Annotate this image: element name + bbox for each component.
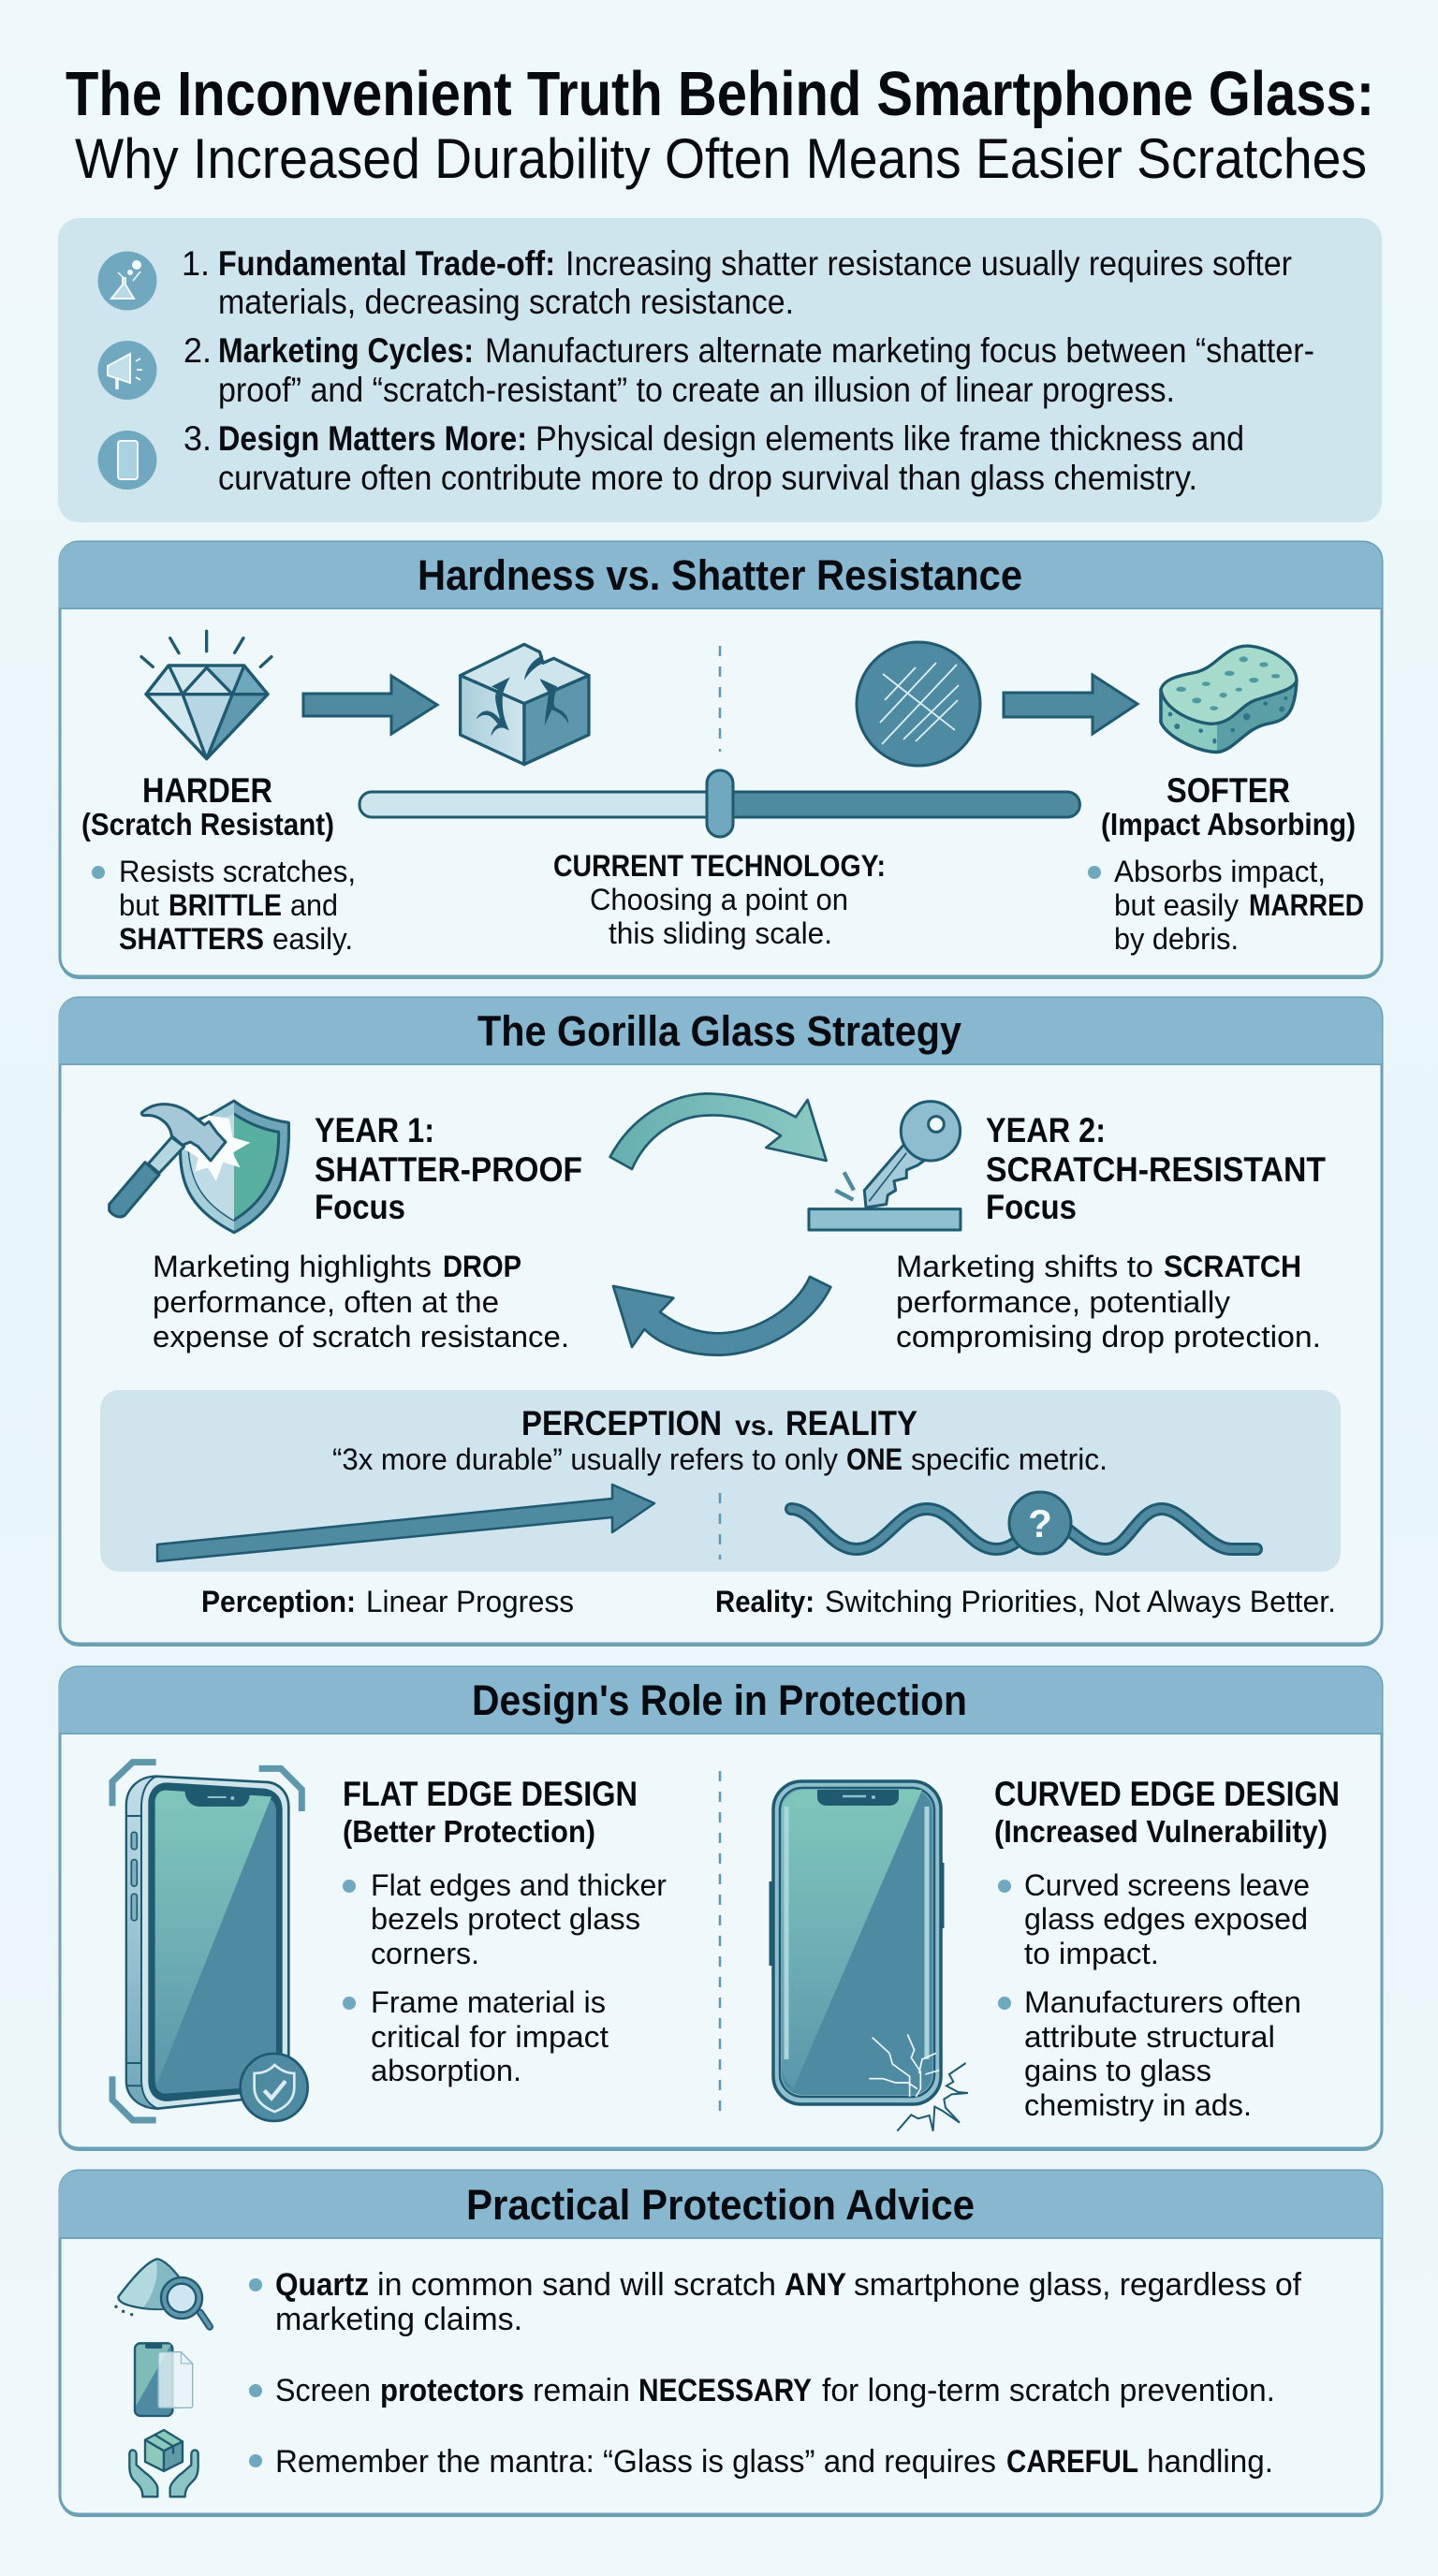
icon: flask	[97, 251, 157, 311]
title: Why Increased Durability Often Means Easier Scratches	[75, 127, 1367, 190]
text: curved edge notes: attribute structural	[1024, 2020, 1275, 2054]
text: screen protectors: protectors	[380, 2373, 524, 2408]
divider	[719, 646, 721, 752]
icon: hands holding box	[129, 2430, 198, 2496]
text: flat edge notes	[343, 1868, 667, 2087]
icon: scratched glass disc	[857, 642, 980, 766]
text: 3x more durable: “3x more durable” usually refers to only	[332, 1442, 838, 1476]
text: harder notes: and	[290, 888, 338, 922]
heading: The Gorilla Glass Strategy	[477, 1007, 961, 1055]
heading: year 2: Focus	[986, 1188, 1077, 1226]
text: 3x more durable	[332, 1442, 1108, 1476]
icon: sand and magnifier	[114, 2259, 210, 2327]
heading: year 2	[986, 1111, 1326, 1226]
text: quartz: marketing claims.	[275, 2302, 522, 2337]
text: softer notes: but easily	[1114, 888, 1239, 922]
icon: wavy line with question mark	[791, 1492, 1256, 1554]
takeaway 3: curvature often contribute more to drop survival than glass chemistry.	[218, 459, 1197, 497]
icon: sponge	[1161, 646, 1297, 752]
text: flat edge notes: bezels protect glass	[371, 1902, 640, 1936]
text: flat edge notes: Frame material is	[371, 1985, 606, 2019]
caption: perception	[201, 1585, 574, 1618]
text: softer notes: by debris.	[1114, 922, 1239, 956]
icon: megaphone	[97, 341, 157, 400]
panel: hardness vs shatter resistance	[59, 542, 1382, 979]
takeaway 2: proof” and “scratch-resistant” to create an illusion of linear progress.	[218, 371, 1175, 409]
heading: Hardness vs. Shatter Resistance	[418, 551, 1022, 599]
text: quartz: in common sand will scratch	[377, 2267, 776, 2303]
title	[66, 59, 1374, 190]
text: curved edge notes: gains to glass	[1024, 2054, 1211, 2087]
arrow: back to year 1	[613, 1277, 830, 1355]
text: current technology	[553, 849, 886, 950]
text: quartz: smartphone glass, regardless of	[854, 2267, 1302, 2303]
text: flat edge notes: absorption.	[371, 2054, 521, 2087]
text: 3x more durable: ONE	[846, 1442, 902, 1476]
text: flat edge notes: critical for impact	[371, 2020, 609, 2054]
heading: year 1: SHATTER-PROOF	[315, 1150, 582, 1189]
text: current technology: CURRENT TECHNOLOGY:	[553, 849, 886, 883]
icon: screen protector	[135, 2343, 193, 2416]
text: mantra: handling.	[1147, 2444, 1273, 2480]
panel: design's role in protection	[59, 1667, 1382, 2151]
caption: reality: Reality:	[715, 1585, 814, 1618]
text: screen protectors: NECESSARY	[638, 2373, 812, 2408]
text: screen protectors: for long-term scratch prevention.	[822, 2373, 1275, 2408]
heading: curved edge: CURVED EDGE DESIGN	[994, 1775, 1340, 1813]
icon: diamond	[141, 631, 271, 759]
text: current technology: Choosing a point on	[590, 883, 848, 916]
label: harder: (Scratch Resistant)	[81, 807, 334, 842]
heading: REALITY	[785, 1404, 917, 1442]
text: year 1 marketing: Marketing highlights	[153, 1250, 432, 1283]
heading: Practical Protection Advice	[466, 2181, 975, 2229]
heading: year 2: YEAR 2:	[986, 1111, 1106, 1149]
icon: curved edge phone	[770, 1781, 968, 2131]
text: year 1 marketing: DROP	[443, 1250, 521, 1283]
heading: year 2: SCRATCH-RESISTANT	[986, 1150, 1326, 1189]
takeaway 2: Marketing Cycles:	[218, 331, 474, 370]
divider	[719, 1493, 721, 1559]
heading: vs.	[735, 1411, 774, 1442]
cracks	[869, 2034, 968, 2131]
label: harder	[81, 771, 334, 842]
caption: perception: Perception:	[201, 1585, 356, 1618]
panel: key takeaways	[58, 218, 1382, 522]
text: year 2 marketing: performance, potentially	[896, 1285, 1230, 1319]
text: curved edge notes	[998, 1868, 1310, 2122]
icon: key scratching surface	[809, 1102, 961, 1230]
text: mantra: CAREFUL	[1006, 2444, 1138, 2480]
text: softer notes: MARRED	[1249, 888, 1364, 922]
label: softer: SOFTER	[1167, 771, 1290, 810]
heading: flat edge: (Better Protection)	[343, 1814, 595, 1849]
text: curved edge notes: glass edges exposed	[1024, 1902, 1308, 1936]
text: flat edge notes: corners.	[371, 1937, 479, 1970]
panel: perception vs reality	[100, 1390, 1341, 1572]
text: harder notes: easily.	[272, 922, 353, 956]
heading: flat edge: FLAT EDGE DESIGN	[343, 1775, 638, 1813]
text: softer notes: Absorbs impact,	[1114, 855, 1326, 888]
heading: Design's Role in Protection	[472, 1676, 967, 1724]
takeaway 3: Design Matters More:	[218, 419, 527, 458]
takeaway 1: 1.	[182, 244, 210, 283]
label: harder: HARDER	[142, 771, 272, 810]
text: year 2 marketing: compromising drop protection.	[896, 1320, 1321, 1354]
text: screen protectors	[249, 2373, 1275, 2408]
panel: the gorilla glass strategy	[59, 998, 1382, 1647]
icon: phone	[97, 431, 157, 490]
takeaway 2	[183, 331, 1314, 409]
text: quartz	[249, 2267, 1302, 2337]
takeaway 2: Manufacturers alternate marketing focus between “shatter-	[485, 331, 1314, 370]
badge: shield check	[241, 2054, 308, 2121]
text: mantra: Remember the mantra: “Glass is glass” and requires	[275, 2444, 996, 2480]
icon: wavy line with question mark: ?	[1028, 1501, 1052, 1545]
slider	[360, 770, 1079, 837]
takeaway 1	[182, 244, 1292, 321]
arrow: harder	[303, 676, 437, 734]
arrow: to year 2	[610, 1093, 827, 1169]
text: 3x more durable: specific metric.	[911, 1442, 1108, 1476]
arrow: linear progress	[157, 1485, 654, 1561]
text: harder notes	[92, 855, 356, 956]
caption: reality: Switching Priorities, Not Always Better.	[825, 1585, 1336, 1618]
text: quartz: ANY	[785, 2267, 846, 2303]
caption: perception: Linear Progress	[366, 1585, 574, 1618]
heading: year 1: Focus	[315, 1188, 405, 1226]
text: year 1 marketing: expense of scratch resistance.	[153, 1320, 569, 1354]
heading	[521, 1404, 917, 1442]
heading: curved edge: (Increased Vulnerability)	[994, 1814, 1328, 1849]
takeaway 1: Increasing shatter resistance usually requires softer	[565, 244, 1292, 283]
text: year 1 marketing	[153, 1250, 569, 1354]
heading: PERCEPTION	[521, 1404, 722, 1442]
takeaway 3	[183, 419, 1244, 497]
text: curved edge notes: Manufacturers often	[1024, 1985, 1301, 2019]
text: harder notes: but	[119, 888, 159, 922]
text: year 1 marketing: performance, often at the	[153, 1285, 499, 1319]
heading: curved edge	[994, 1775, 1340, 1849]
takeaway 3: 3.	[183, 419, 212, 458]
text: harder notes: SHATTERS	[119, 922, 264, 956]
text: curved edge notes: Curved screens leave	[1024, 1868, 1310, 1902]
label: softer: (Impact Absorbing)	[1101, 807, 1356, 842]
text: screen protectors: Screen	[275, 2373, 371, 2408]
takeaway 1: materials, decreasing scratch resistance.	[218, 283, 794, 321]
divider	[719, 1771, 721, 2117]
label: softer	[1101, 771, 1356, 842]
takeaway 3: Physical design elements like frame thickness and	[536, 419, 1244, 458]
arrow: softer	[1004, 675, 1137, 734]
heading: flat edge	[343, 1775, 638, 1849]
text: curved edge notes: chemistry in ads.	[1024, 2088, 1252, 2122]
takeaway 1: Fundamental Trade-off:	[218, 244, 555, 283]
icon: flat edge phone	[112, 1763, 308, 2121]
heading: year 1	[315, 1111, 582, 1226]
heading: year 1: YEAR 1:	[315, 1111, 434, 1149]
text: year 2 marketing: SCRATCH	[1164, 1250, 1301, 1283]
panel: practical protection advice	[59, 2171, 1382, 2517]
text: quartz: Quartz	[275, 2267, 369, 2303]
text: softer notes	[1088, 855, 1364, 956]
text: year 2 marketing	[896, 1250, 1321, 1354]
text: year 2 marketing: Marketing shifts to	[896, 1250, 1153, 1283]
text: flat edge notes: Flat edges and thicker	[371, 1868, 667, 1902]
text: harder notes: Resists scratches,	[119, 855, 356, 888]
text: current technology: this sliding scale.	[609, 916, 832, 950]
text: harder notes: BRITTLE	[169, 888, 282, 922]
icon: cracked cube	[461, 644, 589, 765]
icon: hammer and shield	[110, 1101, 289, 1233]
text: curved edge notes: to impact.	[1024, 1937, 1159, 1970]
text: screen protectors: remain	[533, 2373, 630, 2408]
takeaway 2: 2.	[183, 331, 212, 370]
